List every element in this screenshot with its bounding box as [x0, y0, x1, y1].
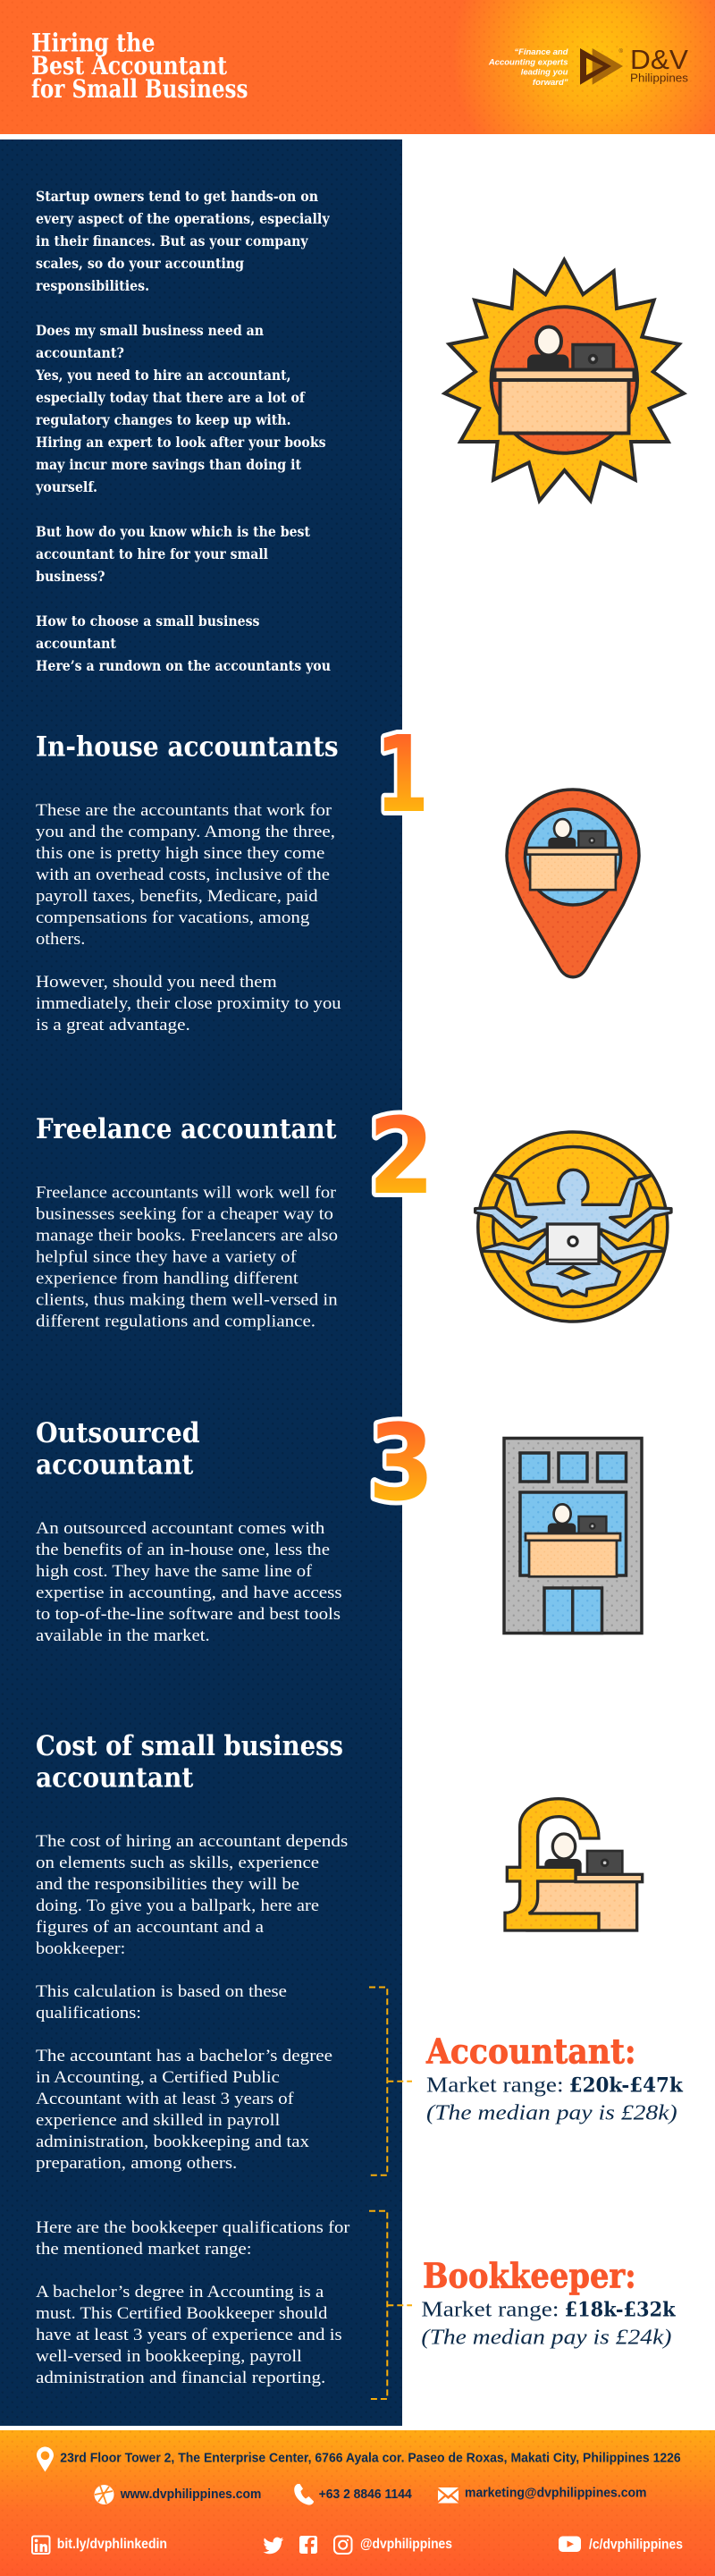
title: for Small Business — [31, 74, 248, 104]
logo: D&V Philippines: Philippines — [630, 72, 689, 85]
heading: outsourced accountant — [36, 1417, 200, 1481]
text: outsourced accountant: expertise in accounting, and have access — [36, 1584, 342, 1602]
icon: sunburst with accountant at desk — [445, 260, 684, 501]
icon: twitter — [263, 2538, 283, 2554]
logo: D&V Philippines: ® — [618, 48, 624, 55]
text: accountant qualifications: preparation, among others. — [36, 2155, 237, 2173]
icon: facebook — [299, 2536, 317, 2554]
intro text: every aspect of the operations, especially — [36, 210, 331, 227]
panel: navy column — [0, 139, 402, 2426]
intro text: regulatory changes to keep up with. — [36, 411, 291, 428]
intro text: in their finances. But as your company — [36, 232, 308, 249]
text: bookkeeper qualifications: administration and financial reporting. — [36, 2369, 325, 2387]
heading: outsourced accountant: Outsourced — [36, 1417, 200, 1449]
title: Best Accountant — [31, 51, 227, 80]
heading: cost of small business accountant: Cost of small business — [36, 1730, 343, 1762]
text: accountant qualifications: This calculation is based on these — [36, 1983, 287, 2001]
intro text: How to choose a small business — [36, 612, 260, 629]
text: in-house accountants: payroll taxes, benefits, Medicare, paid — [36, 888, 318, 906]
website: www.dvphilippines.com — [120, 2487, 261, 2502]
tagline: Accounting experts — [488, 57, 568, 68]
intro text: Yes, you need to hire an accountant, — [35, 367, 291, 384]
tagline: forward” — [533, 78, 568, 88]
text: cost of accountant: on elements such as skills, experience — [36, 1854, 319, 1872]
text: in-house accountants: However, should you need them — [36, 974, 277, 992]
icon: multi-armed freelancer with laptop — [475, 1132, 671, 1322]
intro text: Hiring an expert to look after your books — [36, 434, 326, 451]
text: freelance accountant: clients, thus making them well-versed in — [36, 1291, 338, 1309]
intro text: accountant — [36, 635, 117, 652]
text: cost of accountant: doing. To give you a ballpark, here are — [36, 1897, 319, 1915]
text: bookkeeper qualifications: have at least 3 years of experience and is — [36, 2327, 342, 2344]
logo: D&V Philippines: D&V — [630, 44, 688, 75]
callout: bookkeeper market range: £18k-£32k — [565, 2299, 676, 2322]
text: bookkeeper qualifications: A bachelor’s degree in Accounting is a — [36, 2284, 324, 2302]
callout: accountant market range: Market range: — [426, 2073, 564, 2097]
instagram handle: @dvphilippines — [360, 2537, 452, 2552]
icon: office building — [504, 1438, 642, 1633]
text: cost of accountant — [36, 1833, 348, 1958]
email: marketing@dvphilippines.com — [465, 2487, 647, 2501]
text: freelance accountant: different regulations and compliance. — [36, 1313, 315, 1330]
intro text: scales, so do your accounting — [36, 255, 244, 272]
text: freelance accountant: helpful since they have a variety of — [36, 1248, 298, 1266]
text: bookkeeper qualifications — [36, 2219, 349, 2387]
text: bookkeeper qualifications: well-versed in bookkeeping, payroll — [36, 2348, 302, 2366]
text: accountant qualifications: in Accounting, a Certified Public — [36, 2069, 280, 2087]
callout: bookkeeper market range: Market range: — [421, 2299, 559, 2322]
intro text: Does my small business need an — [36, 322, 264, 339]
heading: outsourced accountant: accountant — [36, 1448, 194, 1481]
text: outsourced accountant: high cost. They have the same line of — [36, 1563, 313, 1581]
text: accountant qualifications: The accountant has a bachelor’s degree — [36, 2048, 332, 2065]
icon: youtube — [559, 2536, 581, 2552]
text: cost of accountant: and the responsibilities they will be — [36, 1876, 299, 1894]
linkedin handle: bit.ly/dvphlinkedin — [57, 2537, 167, 2552]
text: in-house accountants: These are the accountants that work for — [36, 802, 332, 820]
callout: accountant market range: Accountant: — [425, 2031, 636, 2071]
intro text: accountant? — [36, 344, 124, 361]
icon: linkedin — [32, 2536, 50, 2554]
bracket: bookkeeper — [369, 2211, 412, 2399]
text: freelance accountant: businesses seeking for a cheaper way to — [36, 1205, 333, 1223]
text: freelance accountant — [36, 1184, 338, 1330]
text: outsourced accountant: available in the market. — [36, 1627, 210, 1645]
text: accountant qualifications: Accountant with at least 3 years of — [36, 2090, 295, 2108]
intro text: business? — [36, 568, 105, 585]
icon: instagram — [334, 2536, 352, 2554]
text: in-house accountants: immediately, their close proximity to you — [36, 995, 341, 1013]
tagline: leading you — [521, 68, 568, 78]
callout: accountant market range — [425, 2031, 684, 2125]
icon: phone — [294, 2484, 314, 2505]
icon: globe — [95, 2485, 114, 2504]
icon: map pin with accountant — [507, 790, 639, 977]
icon: location pin — [37, 2446, 54, 2471]
text: in-house accountants: others. — [36, 931, 85, 949]
text: in-house accountants: you and the company. Among the three, — [36, 823, 335, 841]
text: freelance accountant: Freelance accountants will work well for — [36, 1184, 336, 1202]
text: outsourced accountant — [36, 1520, 342, 1645]
icon: mail — [438, 2487, 458, 2504]
text: freelance accountant: manage their books. Freelancers are also — [36, 1227, 338, 1245]
intro text: yourself. — [35, 478, 97, 495]
footer — [0, 2430, 715, 2576]
text: accountant qualifications — [36, 1983, 332, 2173]
bracket: accountant — [369, 1987, 412, 2175]
heading: cost of small business accountant — [36, 1730, 343, 1794]
title — [31, 29, 248, 104]
intro text: may incur more savings than doing it — [36, 456, 302, 473]
callout: bookkeeper market range: Bookkeeper: — [423, 2255, 636, 2295]
number 1: 1 — [375, 713, 429, 836]
title: Hiring the — [31, 29, 156, 57]
intro text: especially today that there are a lot of — [36, 389, 306, 406]
callout: accountant market range: £20k-£47k — [569, 2073, 684, 2097]
text: bookkeeper qualifications: Here are the bookkeeper qualifications for — [36, 2219, 349, 2237]
text: bookkeeper qualifications: the mentioned market range: — [36, 2241, 252, 2259]
callout: accountant market range: (The median pay is £28k) — [426, 2102, 677, 2125]
text: freelance accountant: experience from handling different — [36, 1270, 299, 1288]
text: cost of accountant: figures of an accountant and a — [36, 1919, 264, 1937]
number 3: 3 — [368, 1401, 434, 1524]
text: outsourced accountant: An outsourced accountant comes with — [36, 1520, 324, 1538]
tagline — [488, 47, 568, 88]
text: bookkeeper qualifications: must. This Certified Bookkeeper should — [36, 2305, 328, 2323]
text: accountant qualifications: experience and skilled in payroll — [36, 2112, 280, 2130]
address: 23rd Floor Tower 2, The Enterprise Center, 6766 Ayala cor. Paseo de Roxas, Makati City, Philippines 1226 — [60, 2451, 681, 2465]
text: in-house accountants — [36, 802, 341, 1035]
callout: bookkeeper market range: (The median pay is £24k) — [421, 2327, 672, 2350]
intro text — [35, 188, 331, 674]
intro text: But how do you know which is the best — [36, 523, 311, 540]
heading: cost of small business accountant: accountant — [36, 1761, 194, 1794]
intro text: Here’s a rundown on the accountants you — [36, 657, 331, 674]
text: in-house accountants: with an overhead costs, inclusive of the — [36, 866, 330, 884]
text: cost of accountant: bookkeeper: — [36, 1940, 125, 1958]
youtube handle: /c/dvphilippines — [589, 2538, 683, 2553]
phone number: +63 2 8846 1144 — [319, 2487, 412, 2502]
text: in-house accountants: this one is pretty high since they come — [36, 845, 324, 863]
text: in-house accountants: is a great advantage. — [36, 1017, 190, 1035]
heading: freelance accountant: Freelance accountant — [36, 1113, 337, 1145]
text: accountant qualifications: administration, bookkeeping and tax — [36, 2133, 310, 2151]
text: outsourced accountant: to top-of-the-line software and best tools — [36, 1606, 341, 1624]
intro text: responsibilities. — [36, 277, 149, 294]
number 2: 2 — [368, 1094, 434, 1218]
text: outsourced accountant: the benefits of an in-house one, less the — [36, 1541, 330, 1559]
heading: in-house accountants: In-house accountants — [36, 731, 339, 764]
text: cost of accountant: The cost of hiring an accountant depends — [36, 1833, 348, 1851]
intro text: accountant to hire for your small — [36, 545, 268, 562]
tagline: “Finance and — [514, 47, 568, 57]
text: accountant qualifications: qualifications: — [36, 2005, 141, 2023]
header banner — [0, 0, 715, 134]
callout: bookkeeper market range — [421, 2255, 676, 2350]
text: in-house accountants: compensations for vacations, among — [36, 909, 309, 927]
intro text: Startup owners tend to get hands-on on — [36, 188, 318, 205]
logo: D&V Philippines — [580, 44, 689, 85]
icon: pound sign with accountant at desk — [505, 1799, 643, 1930]
